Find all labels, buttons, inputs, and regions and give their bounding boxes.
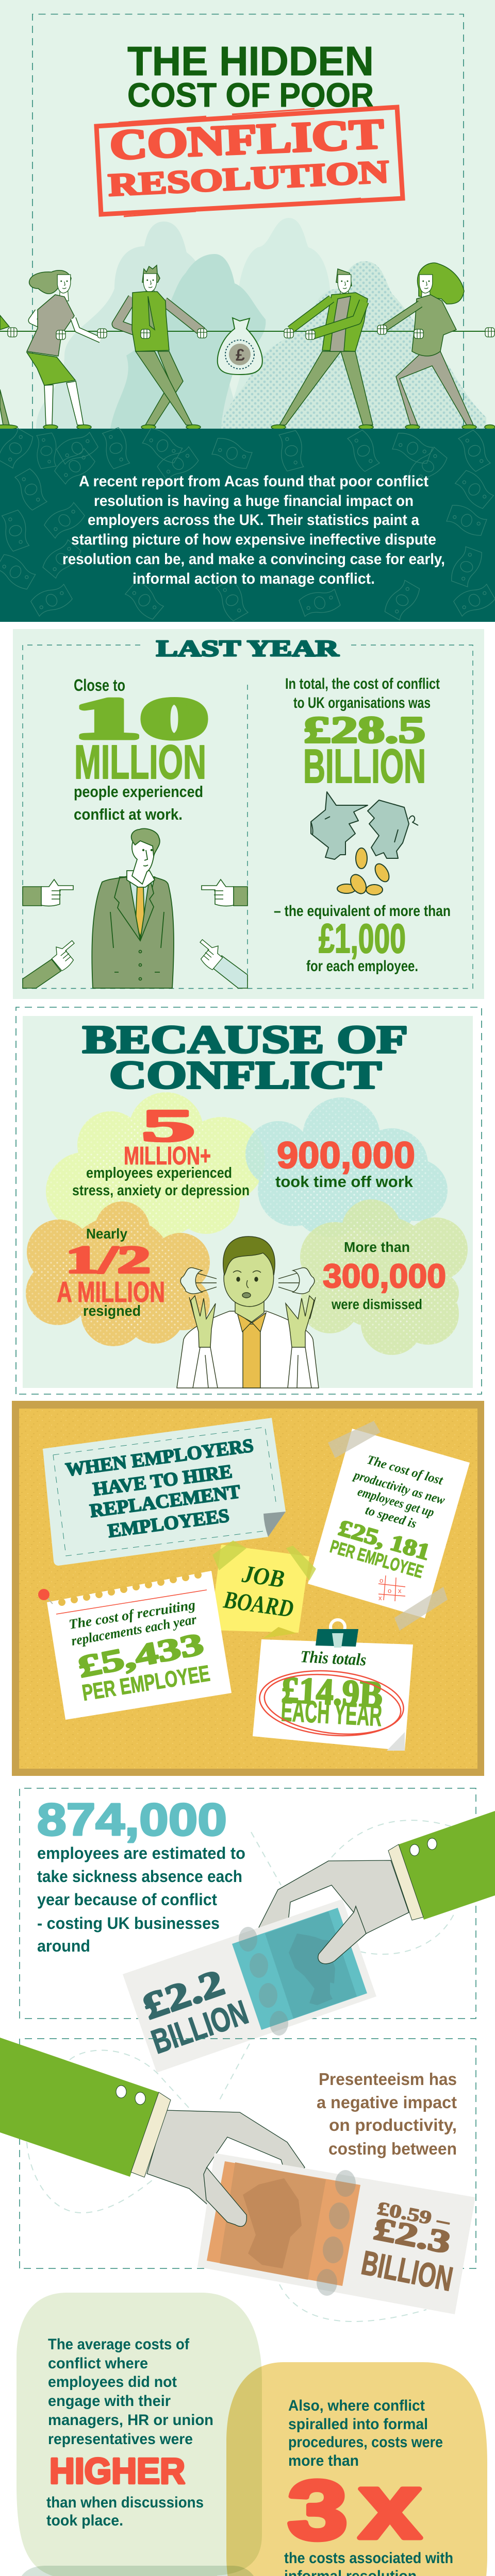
heading: BECAUSE OF: [82, 1018, 408, 1061]
stat: 5 million: 5: [142, 1101, 195, 1151]
stat: 5 million: [72, 1101, 250, 1199]
stat: 1000 per employee: £1,000: [319, 916, 406, 961]
stat: half a million: [57, 1226, 165, 1319]
stat: 1000 per employee: – the equivalent of more than: [274, 903, 451, 920]
note: recruiting: The cost of recruiting: [68, 1597, 196, 1632]
sleeve: [388, 1811, 495, 1920]
text: three times: more than: [288, 2452, 359, 2469]
stat: 300,000: were dismissed: [331, 1296, 422, 1312]
figure: man in jacket: [271, 269, 373, 430]
presenteeism text: costing between: [328, 2139, 457, 2158]
icon: binder clip: [316, 1620, 358, 1648]
rope: [0, 331, 495, 332]
stat: 28.5 billion: In total, the cost of conflict: [285, 675, 440, 692]
note: heading: WHEN EMPLOYERS: [64, 1435, 255, 1481]
text: higher: [46, 2336, 213, 2529]
text: higher: than when discussions: [46, 2494, 204, 2511]
figure: woman pulling: [27, 270, 107, 430]
note: productivity: £25, 181: [336, 1515, 433, 1565]
icon: noughts and crosses: x: [378, 1594, 382, 1602]
intro text: A recent report from Acas found that poor conflict: [79, 473, 428, 490]
banknote pattern: [0, 426, 495, 622]
stat: 300,000: [323, 1239, 446, 1312]
heading: LAST YEAR: [156, 636, 340, 661]
note: productivity: employees get up: [356, 1485, 436, 1520]
title: COST OF POOR: [127, 76, 374, 114]
panel: sickness absence: [20, 1788, 495, 2073]
figure: accused man: [92, 828, 174, 988]
intro text: [62, 473, 445, 587]
note: heading: REPLACEMENT: [89, 1481, 242, 1522]
cloud: yellow: [46, 1092, 265, 1239]
note: recruiting: £5,433: [75, 1626, 206, 1684]
icon: noughts and crosses: [378, 1575, 405, 1602]
icon: hand holding orange banknote: £2.3: [371, 2211, 454, 2260]
stat: half a million: resigned: [83, 1303, 141, 1319]
stat: 874,000: 874,000: [37, 1794, 227, 1845]
note: productivity: PER EMPLOYEE: [328, 1536, 425, 1582]
stat: 5 million: MILLION+: [124, 1142, 211, 1170]
icon: noughts and crosses: o: [380, 1577, 383, 1584]
icon: hand holding banknote: £2.2: [138, 1961, 229, 2027]
stamp: conflict resolution: RESOLUTION: [107, 154, 390, 203]
text: three times: Also, where conflict: [288, 2397, 425, 2414]
text: higher: took place.: [46, 2512, 123, 2529]
stat: 10 million: 10: [74, 687, 208, 751]
icon: hand holding orange banknote: £0.59 –: [375, 2198, 452, 2232]
icon: money bag: [218, 318, 262, 375]
note: total: [253, 1620, 413, 1751]
text: higher: employees did not: [48, 2374, 177, 2391]
dashed frame: [32, 14, 464, 429]
stat: 10 million: people experienced: [74, 783, 203, 801]
heading: CONFLICT: [109, 1054, 382, 1097]
icon: falling coins: [337, 848, 392, 896]
presenteeism text: a negative impact: [317, 2093, 457, 2112]
stat: half a million: A MILLION: [57, 1276, 165, 1309]
note: productivity: [308, 1421, 470, 1631]
text: three times: x: [359, 2454, 421, 2558]
panel: corkboard: [12, 1401, 484, 1776]
sickness text: take sickness absence each: [37, 1867, 242, 1886]
text: three times: procedures, costs were: [288, 2434, 443, 2451]
stat: 1000 per employee: for each employee.: [306, 958, 418, 975]
intro text: resolution is having a huge financial impact on: [94, 493, 414, 510]
note: recruiting: replacements each year: [70, 1612, 198, 1649]
text: higher: representatives were: [48, 2431, 193, 2448]
note: total: This totals: [300, 1648, 367, 1670]
note: job board sticky: BOARD: [222, 1586, 295, 1623]
stamp: conflict resolution: CONFLICT: [109, 110, 385, 168]
text: higher: engage with their: [48, 2393, 171, 2410]
stat: 28.5 billion: £28.5: [304, 709, 425, 751]
dashed frame: [23, 645, 473, 988]
intro text: resolution can be, and make a convincing case for early,: [62, 551, 445, 568]
stat: 300,000: More than: [344, 1239, 410, 1255]
note: job board sticky: JOB: [240, 1560, 286, 1593]
sickness text: - costing UK businesses: [37, 1914, 220, 1933]
note: total: £14.9B: [280, 1669, 384, 1715]
stat: 300,000: 300,000: [323, 1257, 446, 1295]
bubble: higher costs: [16, 2293, 262, 2576]
icon: hand holding banknote: [123, 1811, 495, 2073]
sickness text: around: [37, 1937, 90, 1955]
icon: pointing hands: [23, 879, 248, 988]
note: job board sticky: [210, 1540, 316, 1638]
panel: because of conflict: [16, 1007, 482, 1394]
stat: 28.5 billion: BILLION: [303, 739, 426, 793]
icon: hand holding orange banknote: [0, 2038, 475, 2314]
stat: half a million: Nearly: [86, 1226, 127, 1242]
icon: pin: [38, 1589, 53, 1604]
text: three times: spiralled into formal: [288, 2416, 428, 2433]
note: productivity: to speed is: [364, 1503, 418, 1531]
text: three times: the costs associated with: [284, 2550, 453, 2567]
dashed money trail: [27, 2044, 426, 2321]
presenteeism text: Presenteeism has: [319, 2070, 457, 2089]
note: heading: [43, 1418, 286, 1566]
red circled emphasis: [257, 1665, 406, 1741]
intro text: startling picture of how expensive ineffective dispute: [71, 531, 436, 548]
presenteeism text: on productivity,: [329, 2115, 457, 2134]
figure: stressed man: [177, 1236, 319, 1388]
panel: presenteeism: [0, 2038, 476, 2321]
cloud: orange: [26, 1201, 210, 1346]
sickness text: [37, 1844, 245, 1955]
stat: 10 million: conflict at work.: [74, 805, 183, 823]
stat: 5 million: employees experienced: [86, 1165, 232, 1181]
icon: noughts and crosses: o: [388, 1587, 391, 1595]
sickness text: year because of conflict: [37, 1890, 217, 1909]
title: THE HIDDEN: [127, 38, 374, 84]
note: total: EACH YEAR: [280, 1693, 383, 1733]
title: [127, 38, 374, 114]
panel: hero: [0, 0, 495, 430]
stat: 10 million: Close to: [74, 676, 125, 694]
note: heading: EMPLOYEES: [107, 1505, 230, 1542]
icon: broken piggy bank: [311, 792, 418, 859]
bubble: average cost: [16, 2566, 261, 2576]
text: three times: 3: [288, 2464, 348, 2557]
note: productivity: productivity as new: [352, 1468, 447, 1507]
stat: 900,000: took time off work: [275, 1173, 414, 1191]
sleeve: [0, 2038, 171, 2177]
figure: woman with green hair: [377, 263, 476, 430]
cloud: green: [300, 1199, 468, 1355]
text: higher: managers, HR or union: [48, 2412, 213, 2429]
stat: 10 million: MILLION: [74, 735, 206, 789]
stat: 900,000: 900,000: [277, 1135, 415, 1176]
note: productivity: The cost of lost: [365, 1453, 445, 1488]
text: higher: conflict where: [48, 2355, 148, 2372]
stat: 5 million: stress, anxiety or depression: [72, 1182, 250, 1199]
sickness text: employees are estimated to: [37, 1844, 245, 1862]
background blobs: [36, 218, 486, 429]
note: heading: HAVE TO HIRE: [92, 1461, 234, 1500]
panel: last year: [13, 629, 484, 999]
stat: 28.5 billion: [285, 675, 440, 793]
figure: left edge person: [0, 315, 18, 430]
figure: man in vest: [117, 265, 207, 430]
dashed money trail: [251, 1820, 455, 1954]
bubble: three times: [226, 2362, 487, 2576]
stat: 28.5 billion: to UK organisations was: [293, 694, 431, 711]
icon: money bag: £: [236, 346, 245, 364]
heading: [82, 1018, 408, 1097]
figure: right edge person: [485, 328, 495, 430]
icon: hand holding banknote: BILLION: [146, 1993, 253, 2061]
note: recruiting: [38, 1571, 232, 1720]
cloud: teal: [245, 1097, 448, 1237]
stamp: conflict resolution: [96, 107, 403, 216]
text: three times: [284, 2397, 453, 2576]
intro text: informal action to manage conflict.: [133, 570, 375, 587]
text: higher: The average costs of: [48, 2336, 190, 2353]
icon: noughts and crosses: x: [398, 1587, 402, 1595]
stat: 10 million: [74, 676, 208, 823]
stat: 1000 per employee: [274, 903, 451, 975]
panel: speech bubbles: [16, 2293, 487, 2576]
presenteeism text: [317, 2070, 457, 2158]
text: higher: HIGHER: [50, 2451, 185, 2491]
stat: half a million: 1/2: [65, 1239, 151, 1281]
intro text: employers across the UK. Their statistics paint a: [88, 512, 419, 529]
panel: intro: [0, 426, 495, 622]
note: recruiting: PER EMPLOYEE: [80, 1660, 211, 1706]
